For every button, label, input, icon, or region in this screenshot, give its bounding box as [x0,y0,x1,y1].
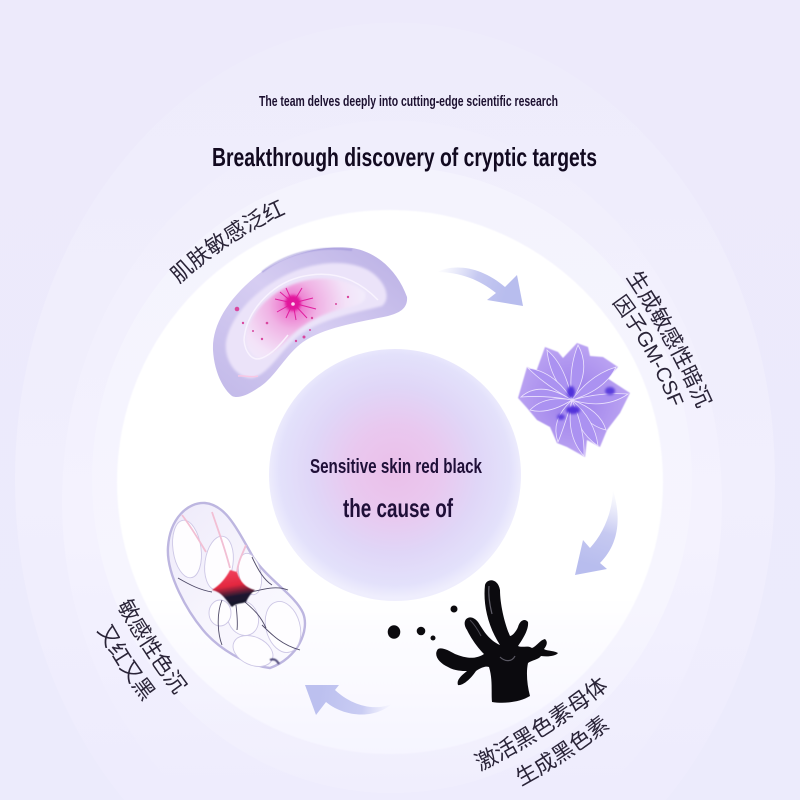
top edge highlight [262,249,352,272]
title: Breakthrough discovery of cryptic targets [212,142,597,172]
label: melanin line 2: 生成黑色素 [516,715,610,786]
pink vessels [182,512,246,572]
icon: black melanocyte [388,580,558,703]
petals [521,345,628,456]
dark vessels [178,557,300,650]
glass contour [244,274,378,359]
center text [310,456,483,523]
arrow: bottom [305,685,392,715]
label: GM-CSF line 1: 生成敏感性暗沉 [626,272,713,408]
black droplets [388,606,458,640]
vesicle inner cells [169,518,306,673]
inner white ring [117,210,663,754]
label: skin sensitive redness: 肌肤敏感泛红 [169,200,286,284]
red-black core [212,570,255,607]
icon: translucent crescent with pink burst [213,247,407,397]
center text: the cause of [343,493,453,523]
label: pigmentation line 1: 敏感性色沉 [118,599,188,695]
center text: Sensitive skin red black [310,456,483,478]
icon: translucent vesicle with red-black cell [168,503,306,673]
icon: purple spiky cell [518,343,630,457]
upper ring [92,167,692,793]
label: melanin line 1: 激活黑色素母体 [474,678,607,772]
pink burst [275,288,316,320]
central sphere [269,349,521,601]
arrow: top [437,267,523,306]
pink dots [235,296,349,342]
subtitle: The team delves deeply into cutting-edge scientific research [259,94,558,110]
label: pigmentation line 2: 又红又黑 [96,624,156,702]
middle ring [62,120,722,800]
arrow: right [575,490,618,575]
label: GM-CSF line 2: 因子GM-CSF [612,294,684,405]
